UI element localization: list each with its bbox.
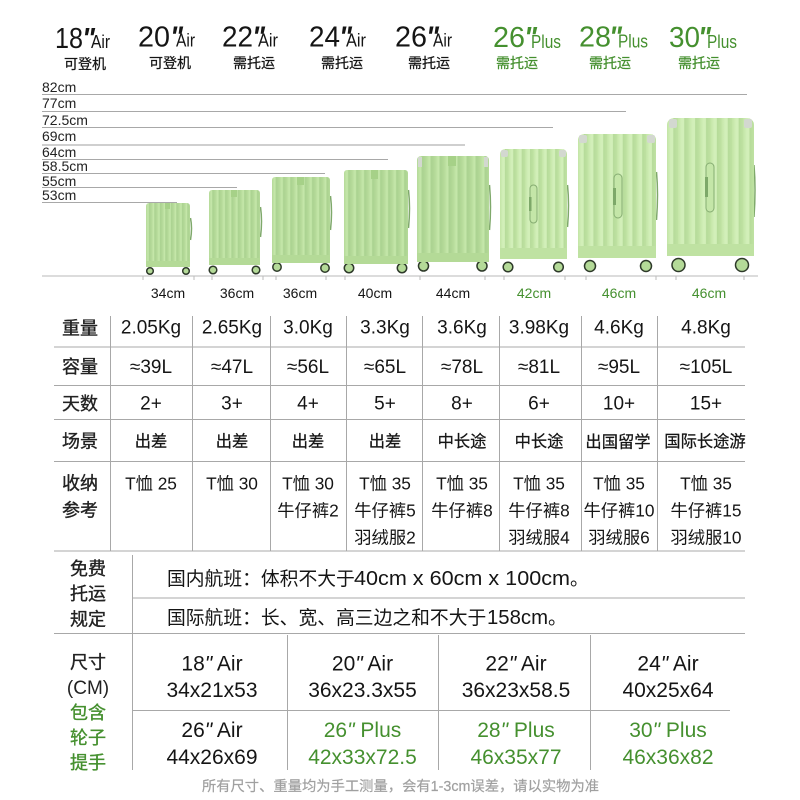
header: 20 Air: 20 xyxy=(138,22,170,54)
row: packing reference: T恤 30 xyxy=(206,474,258,494)
suitcase 22 Air xyxy=(272,177,332,272)
row: days xyxy=(62,394,722,414)
bottom row sizes: 26" Air xyxy=(181,719,243,742)
row: weight: 3.3Kg xyxy=(360,318,410,338)
row: scenario: 出差 xyxy=(369,433,401,451)
top row sizes xyxy=(166,652,714,702)
header: 24 Air: 24 xyxy=(309,22,340,54)
header: 28 Plus: Plus xyxy=(618,32,648,52)
row: capacity: ≈47L xyxy=(211,357,253,378)
row: days: 4+ xyxy=(297,394,319,414)
dimensions label: 轮子 xyxy=(70,728,106,748)
top row sizes: 20" Air xyxy=(332,652,393,676)
header: 28 Plus: 28 xyxy=(579,22,611,54)
international rule: 国际航班：长、宽、高三边之和不大于 xyxy=(167,607,486,628)
width axis: 36cm xyxy=(283,285,317,301)
suitcase 24 Air xyxy=(344,170,410,273)
row: scenario: 国际长途游 xyxy=(664,433,746,451)
row: days: 3+ xyxy=(221,394,243,414)
row: packing reference: 牛仔裤10 xyxy=(583,500,655,520)
row: capacity: ≈65L xyxy=(364,357,406,378)
bottom row sizes: 42x33x72.5 xyxy=(308,746,417,769)
suitcase 26 Plus xyxy=(500,149,568,272)
header: 24 Air xyxy=(309,22,366,71)
height scale: 72.5cm xyxy=(42,112,88,128)
header: 26 Plus: 26 xyxy=(493,22,525,54)
header: 26 Air: 需托运 xyxy=(408,55,450,71)
row: capacity: ≈39L xyxy=(130,357,172,378)
header: 30 Plus: 需托运 xyxy=(678,55,720,71)
header: 26 Plus: 需托运 xyxy=(496,55,538,71)
height scale: 53cm xyxy=(42,187,76,203)
header: 24 Air: " xyxy=(339,22,353,54)
row: days: 天数 xyxy=(62,394,98,414)
bottom row sizes: 28" Plus xyxy=(477,719,555,742)
row: packing reference: 羽绒服10 xyxy=(670,528,742,548)
rules label: 托运 xyxy=(70,584,106,604)
row: packing reference: T恤 25 xyxy=(125,474,177,494)
row: capacity: ≈78L xyxy=(441,357,483,378)
international rule: 。 xyxy=(548,607,567,628)
rules label xyxy=(70,559,106,630)
header: 22 Air xyxy=(222,22,278,71)
bottom row sizes: 44x26x69 xyxy=(166,746,258,769)
header: 26 Air: Air xyxy=(433,30,452,50)
header: 18 Air: 可登机 xyxy=(64,56,106,72)
top row sizes: 22" Air xyxy=(485,652,547,676)
width axis: 42cm xyxy=(517,285,551,301)
row: capacity: ≈95L xyxy=(598,357,640,378)
top row sizes: 24" Air xyxy=(637,652,699,676)
height scale: 69cm xyxy=(42,128,76,144)
header: 18 Air: Air xyxy=(91,32,110,52)
spec table xyxy=(54,316,746,551)
header: 26 Plus xyxy=(493,22,561,71)
top row sizes: 18" Air xyxy=(181,652,243,676)
header: 24 Air: Air xyxy=(346,30,366,50)
row: packing reference: 羽绒服6 xyxy=(588,528,650,548)
width axis: 46cm xyxy=(602,285,636,301)
row: packing reference: 牛仔裤8 xyxy=(431,500,493,520)
header: 22 Air: " xyxy=(252,22,266,54)
height scale xyxy=(42,79,747,203)
row: days: 5+ xyxy=(374,394,396,414)
header: 18 Air xyxy=(55,23,110,72)
header: 28 Plus: " xyxy=(609,22,623,54)
width axis: 34cm xyxy=(151,285,185,301)
top row sizes: 36x23.3x55 xyxy=(308,679,417,702)
domestic rule: 国内航班：体积不大于 xyxy=(167,568,355,589)
height scale: 82cm xyxy=(42,79,76,95)
row: days: 6+ xyxy=(528,394,550,414)
row: weight: 3.0Kg xyxy=(283,318,333,338)
row: capacity: ≈56L xyxy=(287,357,329,378)
row: packing reference: T恤 35 xyxy=(436,474,488,494)
top row sizes: 40x25x64 xyxy=(622,679,714,702)
dimensions label: 提手 xyxy=(70,753,106,773)
header: 30 Plus: " xyxy=(698,22,712,54)
row: weight: 4.6Kg xyxy=(594,318,644,338)
rules label: 规定 xyxy=(70,610,106,630)
row: packing reference: T恤 35 xyxy=(593,474,645,494)
row: scenario: 出国留学 xyxy=(585,434,651,452)
header: 30 Plus: Plus xyxy=(707,32,737,52)
height scale: 58.5cm xyxy=(42,158,88,174)
bottom row sizes xyxy=(166,719,714,769)
header: 22 Air: 需托运 xyxy=(233,55,275,71)
row: packing reference: T恤 35 xyxy=(513,474,565,494)
header: 18 Air: " xyxy=(82,23,96,55)
header: 30 Plus: 30 xyxy=(669,22,700,54)
row: days: 10+ xyxy=(603,394,635,414)
row: scenario: 中长途 xyxy=(515,433,563,451)
row: days: 8+ xyxy=(451,394,473,414)
header: 26 Plus: " xyxy=(524,22,538,54)
header: 22 Air: 22 xyxy=(222,22,253,54)
free baggage rules xyxy=(54,555,745,770)
row: packing reference: 参考 xyxy=(62,500,98,520)
dimensions label: 尺寸 xyxy=(70,652,106,672)
suitcase 26 Air xyxy=(417,156,490,271)
header: 20 Air: " xyxy=(170,22,184,54)
row: packing reference: T恤 30 xyxy=(282,474,334,494)
row: capacity: ≈105L xyxy=(680,357,732,378)
suitcase 20 Air xyxy=(209,190,262,274)
row: packing reference: 牛仔裤8 xyxy=(508,500,570,520)
header: 26 Plus: Plus xyxy=(531,32,561,52)
header: 26 Air: " xyxy=(426,22,440,54)
row: scenario: 出差 xyxy=(216,433,248,451)
row: scenario: 中长途 xyxy=(438,433,486,451)
header: 20 Air: 可登机 xyxy=(149,55,191,71)
row: packing reference xyxy=(62,474,742,548)
domestic rule: 40cm x 60cm x 100cm xyxy=(354,567,570,590)
width axis: 36cm xyxy=(220,285,254,301)
header: 20 Air: Air xyxy=(176,30,195,50)
header: 26 Air xyxy=(395,22,452,71)
width axis: 46cm xyxy=(692,285,726,301)
suitcase 28 Plus xyxy=(578,134,658,272)
suitcases xyxy=(146,118,755,274)
header: 20 Air xyxy=(138,22,195,71)
suitcase 18 Air xyxy=(146,203,192,274)
footnote: 所有尺寸、重量均为手工测量，会有1-3cm误差，请以实物为准 xyxy=(202,778,599,795)
dimensions table xyxy=(67,635,730,773)
width axis xyxy=(42,276,758,301)
row: weight: 2.65Kg xyxy=(202,318,262,338)
header: 18 Air: 18 xyxy=(55,23,83,55)
dimensions label: (CM) xyxy=(67,678,109,699)
row: packing reference: T恤 35 xyxy=(680,474,732,494)
top row sizes: 36x23x58.5 xyxy=(462,679,570,702)
row: scenario xyxy=(62,432,746,452)
domestic rule xyxy=(167,567,589,590)
height scale: 55cm xyxy=(42,173,76,189)
row: capacity: 容量 xyxy=(62,357,98,377)
row: scenario: 出差 xyxy=(292,433,324,451)
row: packing reference: T恤 35 xyxy=(359,474,411,494)
width axis: 44cm xyxy=(436,285,470,301)
domestic rule: 。 xyxy=(570,568,589,589)
header: 28 Plus: 需托运 xyxy=(589,55,631,71)
size headers xyxy=(55,22,737,72)
row: capacity: ≈81L xyxy=(518,357,560,378)
suitcase 30 Plus xyxy=(667,118,755,272)
row: weight: 2.05Kg xyxy=(121,318,181,338)
bottom row sizes: 46x35x77 xyxy=(470,746,562,769)
dimensions label xyxy=(67,652,109,773)
row: packing reference: 羽绒服4 xyxy=(508,528,570,548)
row: weight: 3.6Kg xyxy=(437,318,487,338)
top row sizes: 34x21x53 xyxy=(166,679,258,702)
bottom row sizes: 46x36x82 xyxy=(622,746,714,769)
header: 24 Air: 需托运 xyxy=(321,55,363,71)
header: 28 Plus xyxy=(579,22,648,71)
row: weight: 3.98Kg xyxy=(509,318,569,338)
width axis: 40cm xyxy=(358,285,392,301)
row: days: 15+ xyxy=(690,394,722,414)
row: weight xyxy=(62,318,731,338)
header: 22 Air: Air xyxy=(258,30,278,50)
row: days: 2+ xyxy=(140,394,162,414)
header: 26 Air: 26 xyxy=(395,22,427,54)
international rule: 158cm xyxy=(487,606,548,629)
row: weight: 4.8Kg xyxy=(681,318,731,338)
dimensions label: 包含 xyxy=(70,703,106,723)
header: 30 Plus xyxy=(669,22,737,71)
row: packing reference: 羽绒服2 xyxy=(354,528,416,548)
row: packing reference: 收纳 xyxy=(62,474,98,494)
bottom row sizes: 26" Plus xyxy=(324,719,401,742)
height scale: 64cm xyxy=(42,144,76,160)
row: scenario: 场景 xyxy=(62,432,98,452)
bottom row sizes: 30" Plus xyxy=(629,719,707,742)
height scale: 77cm xyxy=(42,95,76,111)
row: capacity xyxy=(62,357,732,378)
rules label: 免费 xyxy=(70,559,106,579)
row: packing reference: 牛仔裤2 xyxy=(277,500,339,520)
row: scenario: 出差 xyxy=(135,433,167,451)
row: weight: 重量 xyxy=(62,318,98,338)
row: packing reference: 牛仔裤15 xyxy=(670,500,742,520)
row: packing reference: 牛仔裤5 xyxy=(354,500,416,520)
